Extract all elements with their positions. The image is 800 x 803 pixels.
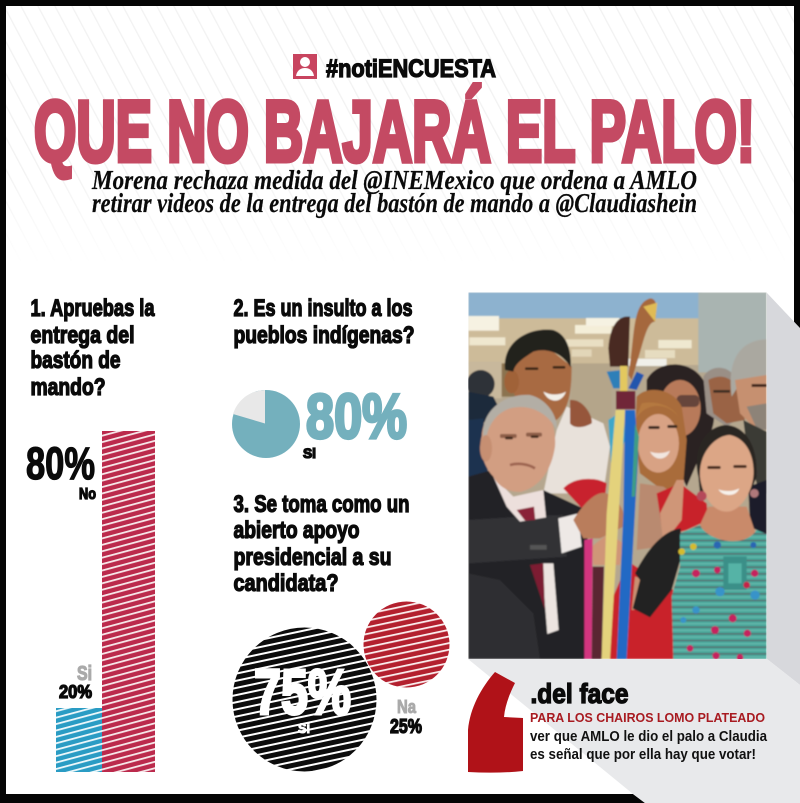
question 3 heading: presidencial a su [234,544,392,571]
label: Na 25%: Na [397,697,417,717]
question 2 heading: 2. Es un insulto a los [234,295,412,322]
question 3 heading [234,491,410,597]
label: 80% No: No [79,486,96,503]
header: #notiENCUESTA [293,54,496,83]
grey shadow band [468,293,800,803]
bar chart [56,431,155,772]
callout body [530,729,768,763]
label: Si 20% [59,663,92,702]
callout body: es señal que por ella hay que votar! [530,747,756,763]
panel: question 3 [232,491,450,772]
question 3 heading: 3. Se toma como un [234,491,410,518]
callout: del face [468,672,768,773]
label: Na 25% [390,697,422,738]
callout heading: .del face [530,678,628,709]
question 1 heading: bastón de [30,347,120,374]
label: Si 20%: Si [77,663,92,685]
circle: 25% [364,602,450,688]
label: Si 20%: 20% [59,682,92,702]
question 1 heading: mando? [30,374,106,401]
hashtag text: #notiENCUESTA [326,55,496,83]
label: 80% No: 80% [26,438,95,489]
question 1 heading: 1. Apruebas la [30,295,155,322]
label: 80% Si: Si [303,445,316,461]
callout body: ver que AMLO le dio el palo a Claudia [530,729,768,745]
icon: quote mark [468,672,523,773]
label: 80% Si: 80% [306,382,407,452]
question 1 heading: entrega del [30,322,134,349]
subtitle: Morena rechaza medida del @INEMexico que ordena a AMLO [91,165,697,195]
circle: 75% Si: 75% [254,656,351,728]
question 2 heading [234,295,414,349]
label: 80% No [26,438,96,503]
callout subheading: PARA LOS CHAIROS LOMO PLATEADO [530,710,765,725]
icon: person badge [293,54,317,79]
subtitle [91,165,697,218]
photo: group with ceremonial staff [467,292,767,661]
circle: 75% Si [232,628,376,772]
panel: question 1 [26,295,155,772]
label: Na 25%: 25% [390,716,422,738]
circle: 75% Si: Si [298,720,310,736]
question 1 heading [30,295,155,401]
question 3 heading: abierto apoyo [234,517,360,544]
question 2 heading: pueblos indígenas? [234,322,414,349]
panel: question 2 [232,295,414,461]
pie chart [232,390,300,458]
question 3 heading: candidata? [234,570,338,597]
